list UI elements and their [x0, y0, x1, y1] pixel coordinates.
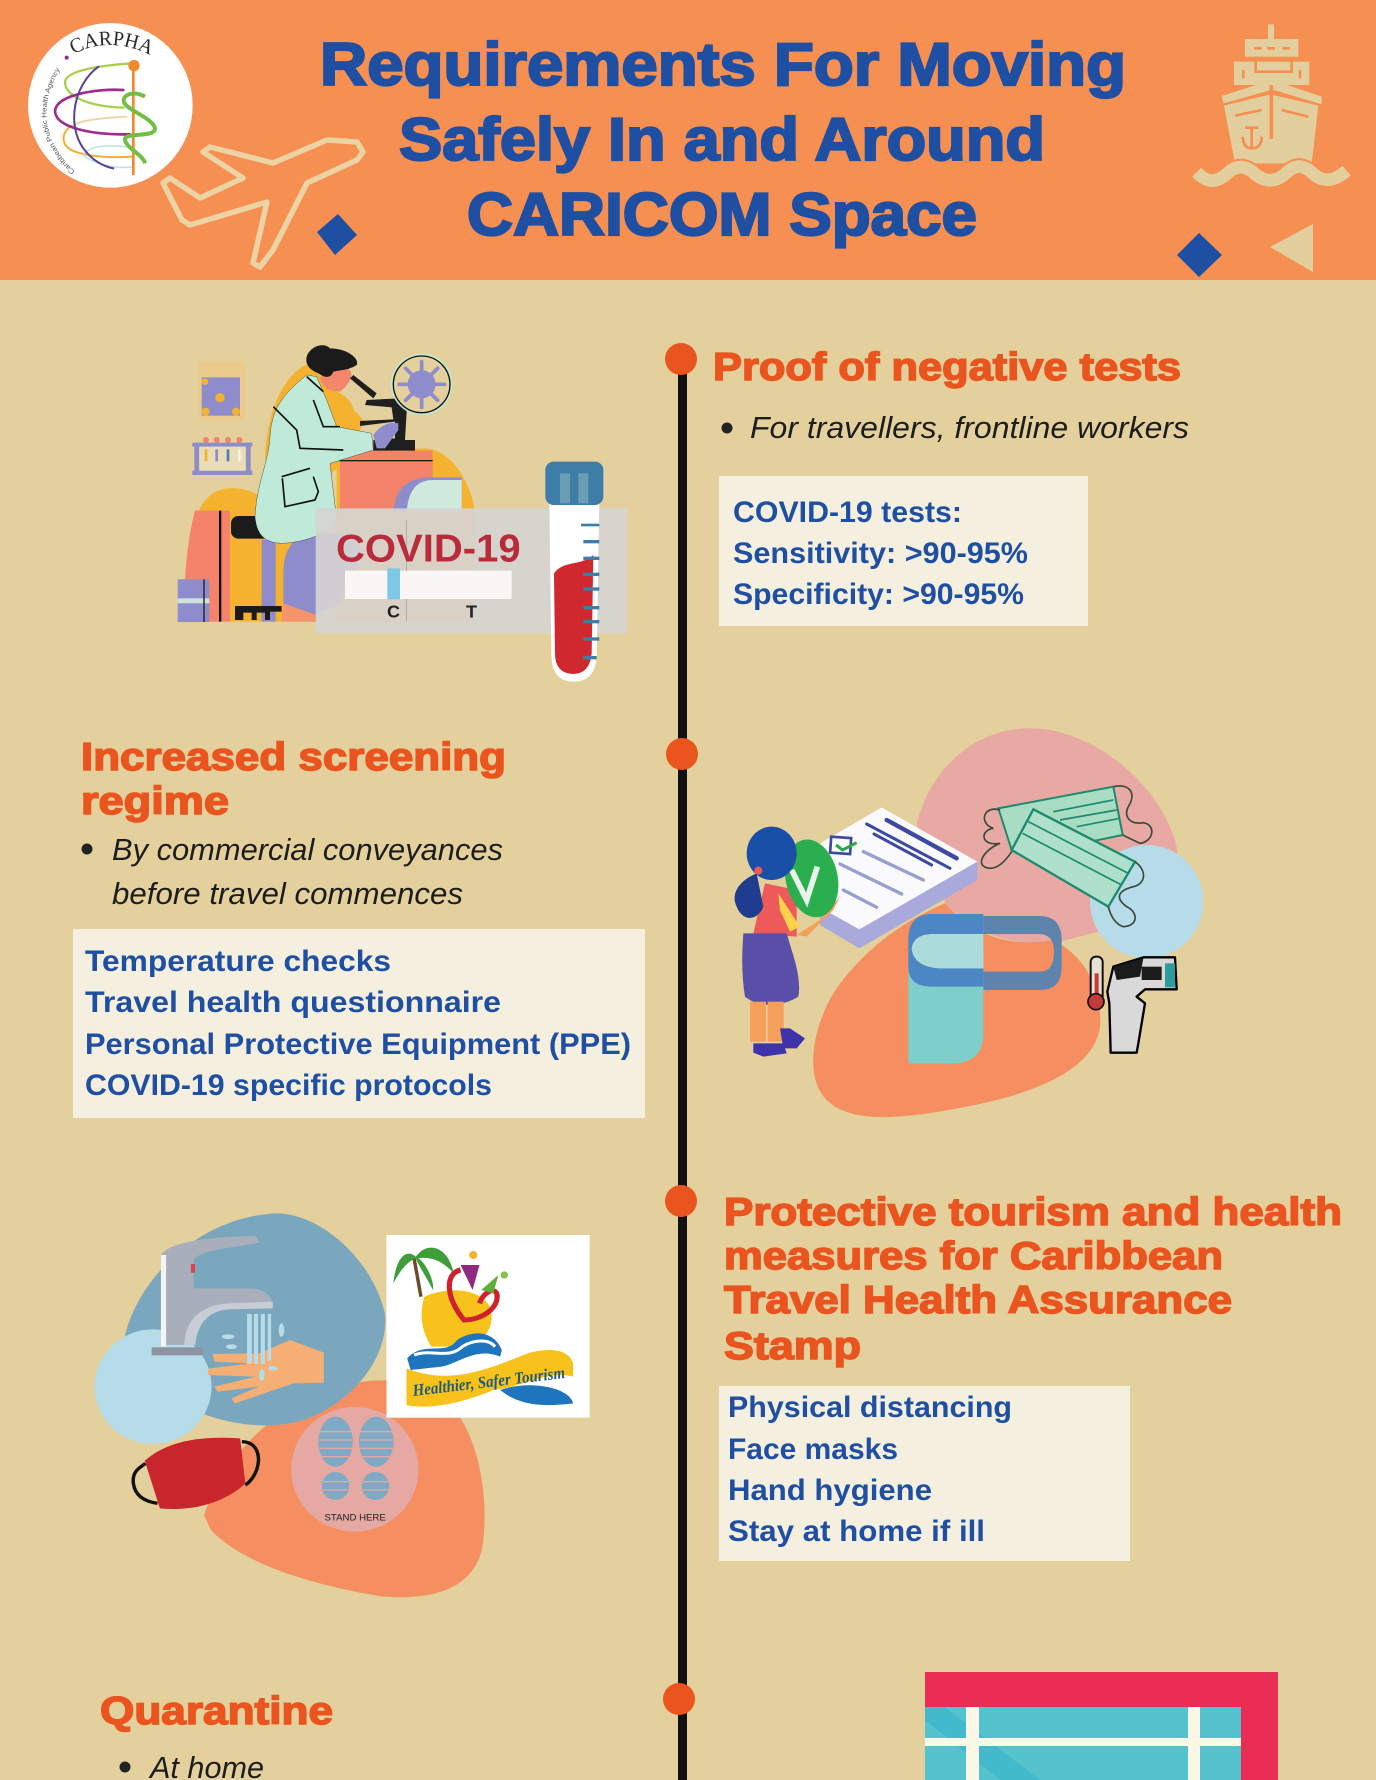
callout: screening measures: Temperature checks — [85, 945, 391, 978]
callout: protective measures: Face masks — [728, 1433, 898, 1466]
decorative triangle — [1270, 224, 1313, 272]
bullet: commercial conveyances: By commercial conveyances — [112, 832, 503, 867]
heading: proof of negative tests: Proof of negative tests — [713, 346, 1181, 389]
timeline dot 3 — [665, 1185, 697, 1217]
heading: protective tourism and health measures: measures for Caribbean — [724, 1235, 1223, 1278]
logo tagline: Caribbean Public Health Agency — [42, 68, 74, 174]
covid test label: COVID-19 — [336, 527, 521, 570]
illustration: checklist, masks, shield and thermometer — [735, 728, 1203, 1117]
title: CARICOM Space — [467, 181, 977, 248]
heading: protective tourism and health measures: Protective tourism and health — [724, 1191, 1342, 1234]
thermometer and infrared gun — [1088, 957, 1177, 1053]
callout: covid-19 tests: COVID-19 tests: — [733, 496, 962, 529]
logo wordmark: CARPHA — [70, 32, 150, 55]
timeline — [663, 343, 698, 1780]
bullet: commercial conveyances — [82, 832, 503, 911]
header banner — [0, 0, 1376, 280]
logo: CARPHA — [28, 23, 193, 188]
timeline dot 1 — [665, 343, 697, 375]
stand here floor sticker — [291, 1407, 419, 1532]
title: Safely In and Around — [399, 106, 1045, 173]
icon: ship — [1197, 24, 1347, 181]
logo slogan: Healthier, Safer Tourism — [411, 1363, 566, 1400]
illustration: hand washing, mask, stand here, stamp — [94, 1213, 590, 1597]
timeline dot 2 — [666, 738, 698, 770]
face masks — [981, 786, 1152, 927]
callout: screening measures: Travel health questionnaire — [85, 986, 501, 1019]
hands under water — [207, 1314, 324, 1403]
paper stack — [807, 807, 977, 948]
blood test tube — [545, 462, 603, 682]
heading: protective tourism and health measures: Travel Health Assurance — [724, 1279, 1232, 1322]
decorative diamond right — [1177, 233, 1222, 277]
illustration: lab scientist and covid test — [178, 345, 627, 682]
strip letter C: C — [387, 602, 400, 622]
callout: covid-19 tests: Sensitivity: >90-95% — [733, 537, 1028, 570]
heading: protective tourism and health measures — [724, 1191, 1342, 1368]
bullet: commercial conveyances: before travel commences — [112, 876, 463, 911]
callout: protective measures: Stay at home if ill — [728, 1515, 985, 1548]
callout: screening measures: COVID-19 specific protocols — [85, 1069, 492, 1102]
person holding badge — [735, 827, 845, 1057]
callout: protective measures: Hand hygiene — [728, 1474, 932, 1507]
callout: covid-19 tests: Specificity: >90-95% — [733, 578, 1024, 611]
callout: screening measures: Personal Protective Equipment (PPE) — [85, 1028, 631, 1061]
heading: increased screening regime — [81, 736, 506, 823]
callout: protective measures: Physical distancing — [728, 1391, 1012, 1424]
bullet: travellers: For travellers, frontline workers — [750, 410, 1189, 445]
decorative diamond left — [317, 214, 357, 255]
callout: screening measures — [73, 929, 645, 1118]
faucet — [152, 1236, 273, 1355]
healthier safer tourism logo — [387, 1235, 590, 1418]
callout: protective measures — [719, 1386, 1130, 1561]
timeline dot 4 — [663, 1683, 695, 1715]
title: Requirements For Moving — [320, 31, 1126, 98]
heading: increased screening regime: regime — [81, 780, 229, 823]
strip letter T: T — [466, 602, 477, 622]
test strip — [345, 568, 512, 599]
red face mask — [133, 1438, 258, 1509]
callout: covid-19 tests — [719, 476, 1088, 626]
face shield — [908, 914, 1062, 1063]
illustration: window — [925, 1672, 1278, 1780]
icon: airplane outline — [163, 140, 363, 267]
heading: increased screening regime: Increased screening — [81, 736, 506, 779]
heading: quarantine: Quarantine — [100, 1690, 333, 1733]
title — [320, 31, 1126, 248]
heading: protective tourism and health measures: Stamp — [724, 1325, 861, 1368]
stand here label: STAND HERE — [325, 1513, 386, 1524]
